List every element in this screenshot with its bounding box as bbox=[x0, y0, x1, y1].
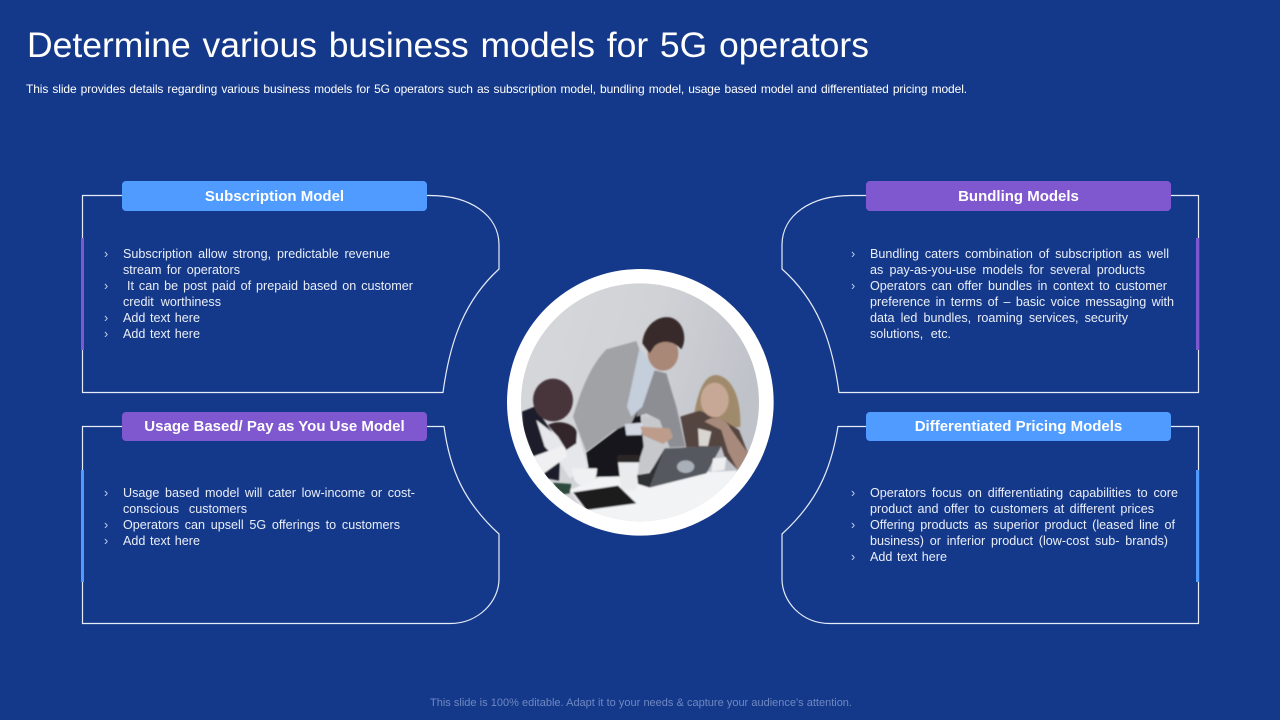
standing man: trousers bbox=[586, 408, 644, 477]
bullet list bbox=[851, 247, 1174, 341]
mug bbox=[572, 468, 597, 485]
bullet list: › bbox=[104, 311, 108, 325]
accent bar bbox=[81, 238, 84, 350]
bullet list: › bbox=[104, 247, 108, 261]
central team photo in white ring bbox=[507, 269, 774, 536]
heading: usage based model bbox=[122, 412, 427, 441]
panel: differentiated pricing models bbox=[781, 412, 1200, 624]
bullet list: preference in terms of – basic voice messaging with bbox=[870, 295, 1174, 309]
bullet list: Add text here bbox=[870, 550, 947, 564]
accent bar bbox=[1196, 470, 1199, 582]
bullet list: Operators can upsell 5G offerings to customers bbox=[123, 518, 400, 532]
bullet list: Add text here bbox=[123, 327, 200, 341]
bullet list: › bbox=[104, 518, 108, 532]
bullet list: solutions, etc. bbox=[870, 327, 951, 341]
bullet list: Subscription allow strong, predictable revenue bbox=[123, 247, 390, 261]
heading: usage based model: Usage Based/ Pay as You Use Model bbox=[144, 418, 405, 435]
heading: subscription model: Subscription Model bbox=[205, 188, 344, 205]
bullet list: › bbox=[851, 279, 855, 293]
bullet list: Add text here bbox=[123, 534, 200, 548]
cup behind laptop bbox=[711, 457, 726, 472]
bullet list bbox=[104, 247, 413, 341]
bullet list: › bbox=[104, 327, 108, 341]
bullet list: data led bundles, roaming services, security bbox=[870, 311, 1128, 325]
heading: differentiated pricing models bbox=[866, 412, 1171, 441]
bullet list: Add text here bbox=[123, 311, 200, 325]
laptop bbox=[650, 446, 721, 488]
coffee cup bbox=[618, 462, 639, 490]
bullet list: product and offer to customers at different prices bbox=[870, 502, 1154, 516]
bullet list: › bbox=[851, 486, 855, 500]
bullet list: › bbox=[851, 247, 855, 261]
bullet list: Bundling caters combination of subscription as well bbox=[870, 247, 1169, 261]
bullet list: › bbox=[104, 486, 108, 500]
bullet list: › bbox=[104, 279, 108, 293]
bullet list: Operators focus on differentiating capabilities to core bbox=[870, 486, 1178, 500]
bullet list: › bbox=[851, 518, 855, 532]
heading: bundling models: Bundling Models bbox=[958, 188, 1079, 205]
bullet list: conscious customers bbox=[123, 502, 247, 516]
bullet list: › bbox=[851, 550, 855, 564]
heading: subscription model bbox=[122, 181, 427, 211]
bullet list bbox=[851, 486, 1178, 564]
bullet list: Usage based model will cater low-income or cost- bbox=[123, 486, 415, 500]
background gap between figures bbox=[638, 416, 678, 476]
subtitle description: This slide provides details regarding various business models for 5G operators such as subscription model, bundling model, usage based model and differentiated pricing model. bbox=[26, 82, 967, 96]
panel: subscription model bbox=[81, 181, 500, 394]
bullet list: Operators can offer bundles in context to customer bbox=[870, 279, 1167, 293]
seated man: vest, shirt, head, hand bbox=[522, 407, 560, 481]
heading: bundling models bbox=[866, 181, 1171, 211]
panel: bundling models bbox=[781, 181, 1200, 394]
bullet list: › bbox=[104, 534, 108, 548]
footer note: This slide is 100% editable. Adapt it to your needs & capture your audience's attention. bbox=[430, 697, 852, 709]
bullet list bbox=[104, 486, 415, 548]
panel: usage based model bbox=[81, 412, 500, 624]
bullet list: as pay-as-you-use models for several products bbox=[870, 263, 1145, 277]
standing man: jacket bbox=[573, 341, 646, 452]
tablet bbox=[573, 486, 636, 510]
bullet list: credit worthiness bbox=[123, 295, 221, 309]
table bbox=[570, 471, 738, 523]
bullet list: Offering products as superior product (leased line of bbox=[870, 518, 1175, 532]
heading: differentiated pricing models: Differentiated Pricing Models bbox=[915, 418, 1122, 435]
accent bar bbox=[81, 470, 84, 582]
accent bar bbox=[1196, 238, 1199, 350]
bullet list: It can be post paid of prepaid based on customer bbox=[127, 279, 413, 293]
title: Determine various business models for 5G operators bbox=[27, 25, 869, 65]
bullet list: business) or inferior product (low-cost sub- brands) bbox=[870, 534, 1168, 548]
bullet list: stream for operators bbox=[123, 263, 240, 277]
plant bbox=[553, 483, 571, 495]
woman: hair, jacket, blouse, face, arm bbox=[694, 375, 740, 430]
